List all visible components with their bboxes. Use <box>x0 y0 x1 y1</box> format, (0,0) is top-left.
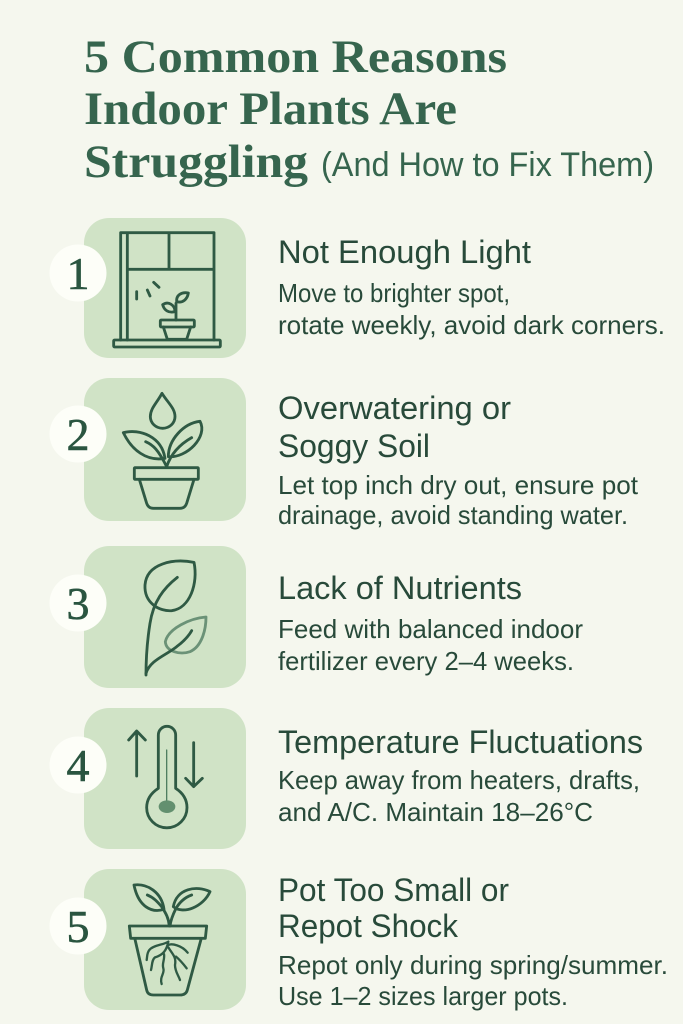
icon: window with plant <box>114 233 220 347</box>
heading 5: Pot Too Small or <box>278 872 509 908</box>
number badge 2 <box>50 406 106 462</box>
number badge 3: 3 <box>66 578 90 629</box>
number badge 1: 1 <box>66 248 90 299</box>
panel 2: overwatering <box>50 378 639 530</box>
title: Indoor Plants Are <box>84 83 457 135</box>
heading 2 <box>278 390 511 464</box>
body 2 <box>278 470 639 530</box>
body 2: drainage, avoid standing water. <box>278 500 628 530</box>
body 4 <box>278 765 640 827</box>
body 1: rotate weekly, avoid dark corners. <box>278 310 665 340</box>
heading 1: Not Enough Light <box>278 234 531 270</box>
body 1: Move to brighter spot, <box>278 278 510 308</box>
panel 1: not enough light <box>50 218 665 358</box>
panel 5: pot too small <box>50 869 668 1011</box>
number badge 1 <box>50 244 106 302</box>
body 3 <box>278 614 583 676</box>
icon: thermometer with arrows <box>129 726 202 828</box>
number badge 5 <box>50 898 106 954</box>
icon: two leaves <box>145 561 206 675</box>
body 5: Use 1–2 sizes larger pots. <box>278 981 568 1011</box>
number badge 5: 5 <box>66 901 90 952</box>
heading 2: Overwatering or <box>278 390 511 426</box>
icon: water drop and potted plant <box>123 393 202 508</box>
body 1 <box>278 278 665 340</box>
heading 5 <box>278 872 509 944</box>
number badge 3 <box>50 574 106 632</box>
heading 2: Soggy Soil <box>278 428 430 464</box>
body 2: Let top inch dry out, ensure pot <box>278 470 639 500</box>
title <box>84 31 654 188</box>
title: 5 Common Reasons <box>84 31 507 83</box>
number badge 4 <box>50 736 106 794</box>
number badge 4: 4 <box>66 740 90 791</box>
body 5: Repot only during spring/summer. <box>278 950 668 980</box>
title: (And How to Fix Them) <box>321 146 654 184</box>
title: Struggling <box>84 136 309 188</box>
body 4: Keep away from heaters, drafts, <box>278 765 640 795</box>
body 3: Feed with balanced indoor <box>278 614 583 644</box>
panel 4: temperature fluctuations <box>50 708 643 849</box>
heading 3: Lack of Nutrients <box>278 570 522 606</box>
body 4: and A/C. Maintain 18–26°C <box>278 797 593 827</box>
heading 4: Temperature Fluctuations <box>278 724 643 760</box>
body 5 <box>278 950 668 1011</box>
body 3: fertilizer every 2–4 weeks. <box>278 646 574 676</box>
heading 5: Repot Shock <box>278 908 459 944</box>
icon: potted plant with roots <box>129 885 210 995</box>
panel 3: lack of nutrients <box>50 546 583 688</box>
number badge 2: 2 <box>66 409 90 460</box>
